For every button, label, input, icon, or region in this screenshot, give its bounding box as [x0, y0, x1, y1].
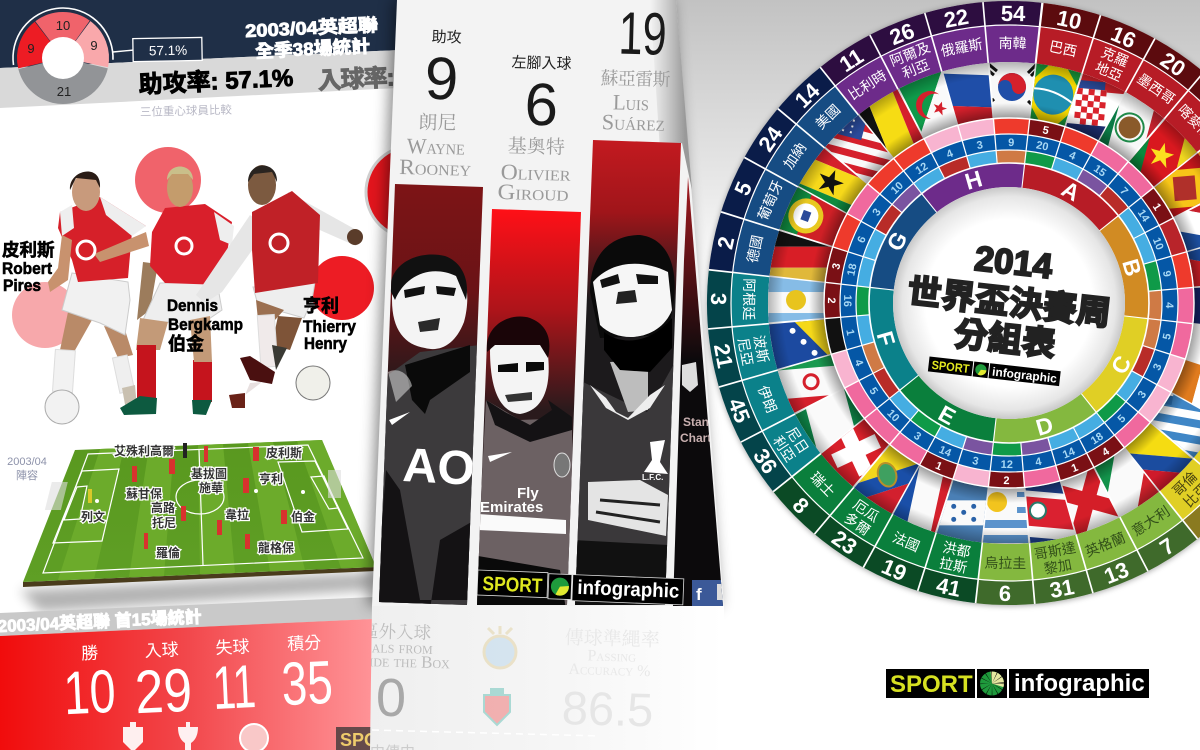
- heading: goal rate: 入球率:: [317, 64, 395, 95]
- ring labels: appearances: 5: [1116, 413, 1128, 426]
- faded text: goals from outside the box: 區外入球: [361, 621, 431, 643]
- logo: SPORT infographic on strikers panel: [477, 570, 684, 605]
- heading: Rooney assists 9: 助攻: [431, 29, 462, 47]
- ring labels: knockout counts: [825, 124, 1163, 487]
- ring labels: team names: 瑞士: [807, 469, 838, 500]
- heading: Rooney assists 9: 朗尼: [418, 111, 457, 134]
- player: Robert Pires: [45, 172, 149, 424]
- flag: Colombia: [1125, 424, 1192, 491]
- ring labels: appearances: 4: [1067, 149, 1078, 163]
- ring labels: world ranking numbers: [706, 1, 1190, 606]
- ring labels: appearances: 5: [1161, 332, 1174, 341]
- donut chart: goals and assists: 9: [90, 38, 98, 53]
- ring labels: world ranking numbers: 7: [1155, 533, 1179, 560]
- callout: 57.1% box: 57.1%: [149, 43, 187, 58]
- heading: Rooney assists 9: Wayne: [406, 133, 465, 160]
- heading: Suarez 19: [599, 0, 673, 136]
- logo: SPORT infographic bottom right: infographic: [1014, 670, 1145, 697]
- stat: goals for: 入球: [144, 640, 179, 661]
- ring labels: group letters: B: [1117, 256, 1147, 279]
- ring labels: group letters: E: [934, 400, 960, 430]
- pitch player labels: 龍格保: [258, 540, 294, 555]
- caption: 2003/04 line-up: 2003/04: [7, 456, 47, 468]
- flag: Costa Rica: [1026, 482, 1075, 543]
- flag: Italy: [1095, 456, 1159, 516]
- flag: Ghana: [767, 116, 899, 248]
- heading: Giroud left-foot goals 6: [497, 54, 574, 206]
- column: Rooney: [379, 184, 483, 605]
- decorative data circles: [12, 146, 458, 348]
- ring labels: team names: 英格蘭: [1083, 529, 1128, 560]
- ring labels: world ranking numbers: 31: [1048, 574, 1076, 603]
- ring labels: appearances: 7: [1117, 185, 1130, 198]
- label: Pires: 皮利斯: [2, 240, 54, 260]
- ring labels: team names: [735, 35, 1200, 578]
- flag: Honduras: [937, 480, 988, 542]
- callout: 57.1% box: [113, 37, 202, 62]
- panel right edge shade: [650, 0, 692, 190]
- flag: Chile: [1188, 248, 1200, 286]
- ring labels: world ranking numbers: 24: [753, 121, 788, 156]
- ring labels: appearances: 3: [1136, 389, 1149, 401]
- ring labels: team names: 伊朗: [755, 383, 780, 415]
- panel: faded lower section: [334, 606, 724, 750]
- logo: SPORT infographic in wheel centre: infographic: [991, 365, 1058, 386]
- logo: SPORT infographic in wheel centre: SPORT: [931, 358, 971, 376]
- column: Rooney: AON: [401, 439, 511, 498]
- pitch player labels: 列文: [81, 509, 105, 524]
- pitch players: [88, 443, 305, 549]
- ring labels: appearances: 9: [1008, 137, 1014, 149]
- ring labels: world ranking numbers: 45: [723, 394, 755, 426]
- heading: first 15 matches: 2003/04英超聯 首15場統計: [0, 606, 202, 636]
- label: Henry: [303, 296, 356, 353]
- ring labels: world ranking numbers: 19: [878, 553, 910, 586]
- header band navy: [0, 0, 400, 68]
- stat: goals for: 29: [133, 656, 194, 726]
- ring labels: world ranking numbers: 22: [942, 4, 971, 33]
- ring labels: appearances: 10: [884, 407, 901, 425]
- pitch player labels: 伯金: [291, 509, 315, 524]
- faded text: passing accuracy: [566, 628, 658, 676]
- flag ring shading: [768, 62, 1200, 544]
- pitch player labels: 艾殊利高爾: [114, 443, 174, 458]
- faded number 86.5: 86.5: [561, 681, 654, 736]
- flag: Australia: [1194, 288, 1200, 324]
- ring labels: world ranking numbers: 16: [1107, 21, 1140, 53]
- ring labels: team names: 巴西: [1048, 38, 1078, 59]
- ring labels: world ranking numbers: 2: [712, 234, 739, 251]
- panel: red first-15 stats bar: [0, 619, 378, 750]
- heading: Giroud left-foot goals 6: 基奧特: [508, 135, 565, 159]
- logo: SPORT infographic on strikers panel: SPORT: [482, 573, 543, 597]
- label: Bergkamp: [167, 296, 243, 354]
- title: 2014 World Cup schedule: 2014: [973, 239, 1055, 287]
- ring labels: team names: 尼亞: [735, 337, 756, 367]
- title: 2014 World Cup schedule: [901, 232, 1117, 370]
- faded text: goals from outside the box: Outside the Box: [334, 650, 450, 672]
- ring labels: team names: 利亞: [770, 433, 799, 465]
- flag: Portugal: [758, 164, 869, 274]
- ring labels: knockout counts: 5: [1041, 124, 1050, 137]
- column: fourth player sliver: Stan: [683, 415, 709, 429]
- ring labels: knockout counts: 3: [830, 262, 843, 271]
- ring: knockout stage colours: [732, 26, 1200, 580]
- stat: goals against: 11: [211, 652, 257, 722]
- ring labels: world ranking numbers: 26: [886, 18, 918, 50]
- ring labels: world ranking numbers: 11: [835, 43, 868, 77]
- caption: 2003/04 line-up: 陣容: [16, 468, 38, 482]
- stat: points: [279, 633, 334, 718]
- player: Thierry Henry: [196, 165, 363, 408]
- ring labels: appearances: 4: [945, 147, 956, 161]
- heading: Rooney assists 9: 9: [424, 45, 459, 112]
- title: 2014 World Cup schedule: 分組表: [952, 315, 1058, 364]
- stat: wins: [61, 643, 117, 727]
- ring labels: world ranking numbers: 36: [748, 444, 783, 478]
- ring labels: appearances: 12: [913, 160, 930, 177]
- pitch player labels: 羅倫: [156, 545, 180, 560]
- label: Henry: 亨利: [303, 296, 339, 316]
- ring labels: team names: 洪都: [941, 539, 972, 560]
- ring labels: team names: 尼日: [783, 424, 812, 456]
- flag: Croatia: [1066, 74, 1125, 140]
- team name ring by group: [603, 0, 1200, 709]
- ring labels: team names: 加納: [780, 140, 809, 172]
- column: Giroud: Emirates: [480, 499, 543, 516]
- ring labels: appearances: 12: [1001, 459, 1013, 471]
- ring labels: group letters: F: [872, 328, 900, 349]
- flag: Greece: [1152, 393, 1200, 458]
- faded text: passing accuracy: Passing: [587, 647, 636, 666]
- flag: Argentina: [768, 277, 824, 322]
- ring: group letters: [809, 103, 1200, 503]
- heading: season stats: [245, 14, 380, 62]
- ring labels: team names: 墨西哥: [1134, 70, 1178, 107]
- heading: season stats: 2003/04英超聯: [245, 14, 379, 41]
- panel: Arsenal 2003/04 statistics: [0, 0, 458, 750]
- flag: Germany: [770, 230, 832, 282]
- grey stats band: [0, 597, 375, 636]
- ring labels: group letters: C: [1106, 351, 1136, 378]
- ring labels: team names: 德國: [744, 234, 765, 264]
- column: Giroud: [477, 209, 581, 605]
- logo: SPORT infographic bottom right: [886, 669, 1149, 698]
- heading: Giroud left-foot goals 6: Olivier: [500, 159, 571, 186]
- label: Henry: Thierry: [303, 317, 356, 336]
- flag: Algeria: [857, 32, 1003, 178]
- ring labels: team names: 哥斯達: [1033, 539, 1077, 562]
- caption: 2003/04 line-up: [7, 456, 47, 482]
- ring labels: team names: 俄羅斯: [940, 36, 984, 59]
- ring labels: appearances: 4: [852, 358, 866, 369]
- ring labels: appearances: 10: [1150, 236, 1166, 252]
- ring labels: knockout counts: 1: [1070, 462, 1080, 475]
- ring labels: world ranking numbers: 5: [729, 178, 757, 199]
- player: Dennis Bergkamp: [120, 166, 234, 415]
- ring labels: appearances: 10: [889, 180, 906, 197]
- flag: Uruguay: [983, 492, 1028, 544]
- pitch player labels: [81, 443, 315, 560]
- column: Giroud: Fly: [517, 485, 539, 502]
- inner base: [824, 118, 1194, 488]
- label: Bergkamp: 伯金: [168, 333, 204, 354]
- ring labels: team names: 阿根廷: [741, 278, 757, 320]
- faded text: passing accuracy: 傳球準繩率: [565, 627, 660, 651]
- ring labels: appearances: 5: [866, 385, 880, 397]
- ring labels: knockout counts: 2: [1003, 475, 1010, 487]
- flag: Iran: [778, 355, 834, 413]
- ring separators, outer: [709, 3, 1200, 603]
- ring: best result colours: [780, 74, 1200, 532]
- ring labels: appearances: 14: [1135, 207, 1152, 225]
- flag: USA: [783, 73, 938, 228]
- heading: Giroud left-foot goals 6: 6: [524, 71, 559, 138]
- ring labels: appearances: 3: [1151, 362, 1165, 372]
- ring labels: team names: 波斯: [751, 334, 772, 364]
- centre disc: [893, 187, 1125, 419]
- donut chart: goals and assists: 9: [27, 41, 35, 56]
- ring labels: team names: 克羅: [1099, 44, 1131, 70]
- flag: England: [1062, 468, 1119, 534]
- ring labels: world ranking numbers: 13: [1100, 557, 1132, 589]
- label: Pires: Pires: [3, 276, 41, 295]
- ring labels: appearances: 6: [855, 235, 869, 245]
- ring labels: team names: 法國: [890, 529, 922, 555]
- flag: Switzerland: [821, 420, 888, 486]
- column: Suarez: [570, 135, 685, 610]
- pitch player labels: 基拔圖: [191, 466, 227, 481]
- ring labels: appearances: 9: [1160, 270, 1173, 278]
- ring labels: appearances: 16: [841, 295, 853, 307]
- ring labels: appearances: 1: [843, 328, 856, 337]
- icon: FA cup: [178, 722, 198, 750]
- donut chart: goals and assists: 10: [56, 18, 70, 33]
- ring labels: appearances: 4: [1034, 456, 1043, 469]
- faded crest: Manchester City: [484, 626, 516, 668]
- icon: league trophy: [123, 722, 143, 750]
- ring labels: team names: 烏拉圭: [984, 555, 1026, 571]
- ring labels: world ranking numbers: 8: [788, 492, 814, 519]
- ring labels: team names: 厄瓜: [850, 496, 882, 525]
- heading: Suarez 19: Suárez: [602, 109, 665, 136]
- pitch player labels: 亨利: [259, 471, 283, 486]
- ring labels: group letters: G: [881, 227, 913, 255]
- label: Pires: [2, 240, 54, 295]
- flag: Bosnia: [769, 320, 830, 369]
- flag: Cameroon: [1129, 120, 1197, 186]
- ring labels: team names: 拉斯: [938, 554, 969, 576]
- stat: wins: 10: [62, 657, 117, 727]
- label: Henry: Henry: [304, 334, 347, 353]
- label: Bergkamp: Dennis: [167, 296, 218, 315]
- ring separators, inner: [824, 118, 1194, 488]
- ring labels: team names: 阿爾及: [887, 39, 932, 69]
- ring labels: team names: 南韓: [999, 35, 1027, 51]
- flag: Brazil: [1030, 64, 1081, 126]
- faded text: goals from outside the box: [371, 623, 450, 668]
- ring labels: group letters: A: [1057, 176, 1084, 206]
- ring labels: appearances: 3: [976, 139, 984, 152]
- logo fragment: SPO: [340, 730, 378, 750]
- ring: blue appearance count: [848, 142, 1170, 464]
- donut chart: goals and assists: 21: [57, 84, 71, 99]
- heading: Suarez 19: 蘇亞雷斯: [600, 68, 671, 90]
- flag: Belgium: [828, 59, 958, 189]
- icon: community shield: [240, 724, 268, 750]
- pitch player labels: 蘇甘保: [126, 486, 162, 501]
- ring labels: group letters: H: [962, 165, 985, 195]
- ring labels: world ranking numbers: 10: [1055, 5, 1084, 35]
- panel: strikers columns: [370, 0, 730, 610]
- stat: points: 積分: [287, 633, 322, 654]
- faded number: 0: [376, 668, 406, 728]
- background: grey gradient behind wheel: [650, 0, 1200, 290]
- ring labels: world ranking numbers: 14: [790, 77, 825, 113]
- flag: Spain: [1154, 153, 1200, 217]
- label: Pires: Robert: [2, 259, 52, 278]
- flag: Nigeria: [796, 389, 864, 453]
- ring labels: team names: 多爾: [841, 509, 873, 538]
- ring labels: team names: 美國: [812, 101, 843, 132]
- pitch player labels: 高路: [151, 500, 175, 515]
- flag: Ecuador: [854, 446, 919, 514]
- ring labels: knockout counts: 1: [933, 460, 944, 473]
- ring labels: knockout counts: 1: [1150, 201, 1163, 213]
- pitch player labels: 韋拉: [225, 507, 249, 522]
- flag: France: [893, 466, 952, 532]
- ring labels: group letters: D: [1033, 411, 1056, 441]
- stat: points: 35: [280, 648, 334, 718]
- heading: season stats: 全季38場統計: [255, 35, 371, 62]
- pitch: 3D football field with line-up: [20, 440, 376, 612]
- ring labels: group letters: [872, 165, 1147, 441]
- flag: Russia: [915, 38, 1026, 149]
- ring labels: world ranking numbers: 21: [709, 342, 738, 370]
- flag: Japan: [1170, 300, 1200, 395]
- ring labels: team names: 黎加: [1043, 556, 1073, 577]
- ring labels: world ranking numbers: 54: [1001, 1, 1026, 26]
- ring labels: appearances: 15: [1091, 163, 1108, 180]
- faded text: passing accuracy: Accuracy %: [568, 661, 651, 680]
- caption: three players comparison: 三位重心球員比較: [140, 103, 233, 119]
- ring labels: world ranking numbers: 6: [999, 581, 1011, 606]
- heading: Suarez 19: 19: [618, 0, 668, 68]
- flag: Mexico: [1099, 92, 1164, 146]
- column: Suarez: L.F.C.: [642, 473, 663, 482]
- ring labels: team names: 意大利: [1129, 503, 1173, 539]
- ring labels: team names: 地亞: [1093, 59, 1125, 84]
- column: fourth player sliver: [673, 178, 723, 606]
- heading: Suarez 19: Luis: [613, 89, 649, 115]
- ring labels: appearances: [841, 137, 1175, 471]
- ring labels: world ranking numbers: 41: [934, 572, 963, 602]
- pitch player labels: 托尼: [152, 515, 176, 530]
- column: fourth player sliver: f: [696, 585, 702, 604]
- ring labels: appearances: 3: [971, 455, 980, 468]
- ring labels: appearances: 14: [1061, 445, 1078, 461]
- ring labels: world ranking numbers: 3: [706, 293, 731, 305]
- heading: Rooney assists 9: [399, 28, 475, 181]
- donut chart: goals and assists: [7, 2, 119, 114]
- ring labels: team names: 葡萄牙: [755, 178, 786, 223]
- ring labels: world ranking numbers: 20: [1156, 47, 1190, 82]
- flag: South Korea: [971, 46, 1053, 128]
- ring labels: knockout counts: 2: [825, 297, 837, 304]
- heading: Giroud left-foot goals 6: Giroud: [497, 179, 569, 206]
- faded text: goals from outside the box: Goals from: [351, 637, 433, 658]
- ring labels: appearances: 20: [1035, 139, 1050, 154]
- stat: wins: 勝: [81, 644, 99, 663]
- faded crest: Liverpool: [484, 688, 510, 725]
- logo: SPORT infographic in wheel centre: [928, 356, 1061, 386]
- stat: goals against: 失球: [215, 637, 250, 658]
- ring labels: team names: 哥倫: [1169, 468, 1200, 499]
- flag: Netherlands: [1180, 205, 1200, 251]
- assist-rate grey band: [0, 50, 400, 108]
- ring labels: appearances: 4: [1163, 302, 1175, 309]
- ring labels: appearances: 3: [870, 206, 884, 218]
- ring labels: appearances: 3: [911, 430, 923, 443]
- heading: Giroud left-foot goals 6: 左腳入球: [511, 54, 572, 73]
- stat: goals against: [211, 637, 257, 722]
- ring labels: world ranking numbers: 23: [827, 525, 862, 560]
- logo: SPORT infographic bottom right: SPORT: [890, 671, 973, 698]
- column: fourth player sliver: Chart: [680, 431, 711, 445]
- ring labels: team names: 比利時: [845, 67, 889, 103]
- pitch player labels: 皮利斯: [266, 445, 302, 460]
- number ring by group: [556, 0, 1200, 750]
- ring labels: knockout counts: 4: [1100, 445, 1113, 459]
- title: 2014 World Cup schedule: 世界盃決賽周: [906, 273, 1112, 333]
- flag: Ivory Coast: [1172, 360, 1200, 404]
- label: Bergkamp: Bergkamp: [168, 315, 243, 334]
- ring labels: appearances: 18: [1089, 430, 1106, 447]
- social icons: [692, 580, 724, 606]
- ring labels: appearances: 14: [937, 444, 954, 460]
- ring labels: appearances: 18: [845, 262, 860, 277]
- wheel: 2014 World Cup groups: [704, 0, 1200, 610]
- pitch player labels: 施華: [199, 480, 223, 495]
- logo: SPORT infographic on strikers panel: infographic: [577, 577, 680, 603]
- ring labels: team names: 利亞: [900, 56, 932, 81]
- heading: Rooney assists 9: Rooney: [399, 154, 472, 181]
- heading: assist rate: 助攻率: 57.1%: [138, 65, 294, 99]
